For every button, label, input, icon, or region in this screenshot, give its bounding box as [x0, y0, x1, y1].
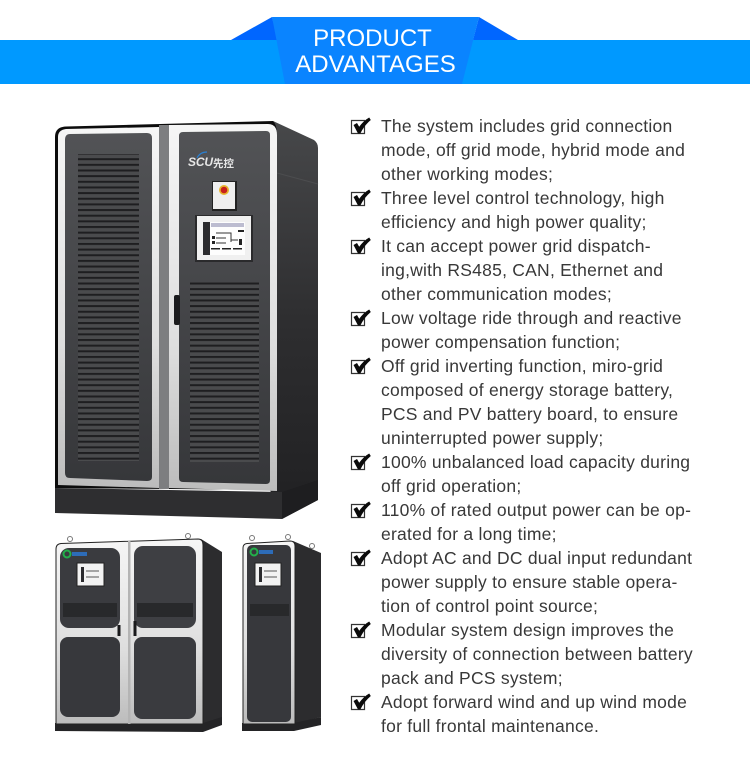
brand logo: SCU: [188, 155, 213, 169]
item 2: efficiency and high power quality;: [381, 212, 647, 232]
main cabinet illustration: [55, 121, 318, 519]
item 10: for full frontal maintenance.: [381, 716, 599, 736]
item 1: mode, off grid mode, hybrid mode and: [381, 140, 685, 160]
item 7: erated for a long time;: [381, 524, 557, 544]
advantages list: [352, 116, 693, 736]
single-door cabinet illustration: [242, 534, 321, 731]
item 9: [352, 620, 693, 688]
item 9: pack and PCS system;: [381, 668, 563, 688]
item 1: [352, 116, 685, 184]
brand logo: [188, 152, 234, 170]
item 1: The system includes grid connection: [381, 116, 672, 136]
screen: [77, 563, 104, 586]
item 5: [352, 356, 678, 448]
item 5: uninterrupted power supply;: [381, 428, 603, 448]
touch screen: [195, 215, 253, 262]
item 3: [352, 236, 663, 304]
lower right panel: [134, 637, 196, 719]
item 3: ing,with RS485, CAN, Ethernet and: [381, 260, 663, 280]
item 9: Modular system design improves the: [381, 620, 674, 640]
title: ADVANTAGES: [295, 51, 456, 78]
header banner: [0, 17, 750, 84]
door panel: [247, 545, 291, 722]
item 5: Off grid inverting function, miro-grid: [381, 356, 663, 376]
vents: [63, 603, 193, 617]
upper left panel: [60, 548, 120, 628]
item 2: Three level control technology, high: [381, 188, 665, 208]
item 8: power supply to ensure stable opera-: [381, 572, 678, 592]
door handle: [174, 295, 180, 325]
item 5: PCS and PV battery board, to ensure: [381, 404, 678, 424]
left door panel: [65, 133, 152, 481]
title: PRODUCT: [313, 25, 432, 52]
item 4: Low voltage ride through and reactive: [381, 308, 682, 328]
logo: [250, 548, 273, 556]
lower left panel: [60, 637, 120, 717]
item 4: power compensation function;: [381, 332, 620, 352]
emergency stop switch: [212, 181, 237, 211]
item 10: [352, 692, 687, 736]
handles: [118, 621, 136, 636]
item 8: Adopt AC and DC dual input redundant: [381, 548, 692, 568]
vent: [250, 604, 289, 616]
screen: [255, 563, 281, 586]
item 3: It can accept power grid dispatch-: [381, 236, 651, 256]
item 10: Adopt forward wind and up wind mode: [381, 692, 687, 712]
item 7: [352, 500, 691, 544]
item 2: [352, 188, 665, 232]
title: [295, 25, 456, 78]
item 5: composed of energy storage battery,: [381, 380, 673, 400]
item 6: [352, 452, 690, 496]
item 9: diversity of connection between battery: [381, 644, 693, 664]
item 6: off grid operation;: [381, 476, 521, 496]
item 3: other communication modes;: [381, 284, 612, 304]
item 8: [352, 548, 692, 616]
double-door cabinet illustration: [55, 534, 222, 732]
right door panel: [179, 131, 270, 484]
item 8: tion of control point source;: [381, 596, 598, 616]
item 7: 110% of rated output power can be op-: [381, 500, 691, 520]
upper right panel: [134, 546, 196, 628]
item 1: other working modes;: [381, 164, 553, 184]
brand logo: 先控: [213, 157, 234, 170]
item 6: 100% unbalanced load capacity during: [381, 452, 690, 472]
logo: [64, 550, 87, 558]
item 4: [352, 308, 682, 352]
